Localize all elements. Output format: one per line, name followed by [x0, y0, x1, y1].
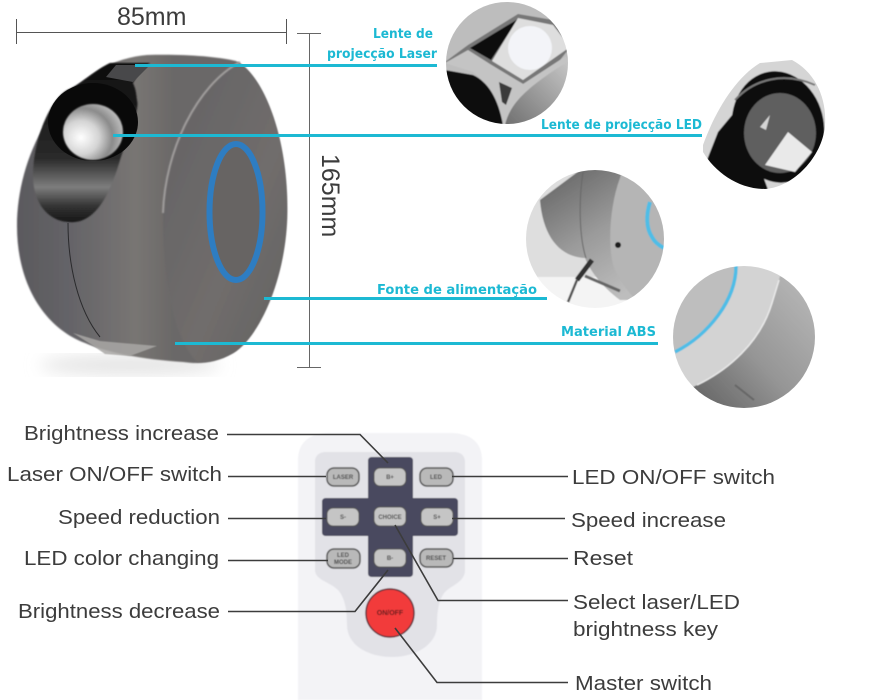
- right labels: brightness key: [573, 618, 719, 641]
- button: S-: S-: [340, 515, 346, 521]
- right labels: [571, 466, 775, 695]
- lens ring: [48, 83, 138, 161]
- button: B-: [374, 549, 406, 567]
- blue ring: [210, 144, 262, 280]
- left labels: [7, 422, 222, 623]
- button: LED: [420, 468, 453, 486]
- seam: [68, 223, 100, 337]
- right labels: Reset: [573, 547, 633, 570]
- button: S+: S+: [433, 515, 441, 521]
- label: laser lens: Lente de: [373, 27, 433, 42]
- detail circle: power input: [525, 168, 668, 310]
- button: CHOICE: [374, 507, 406, 526]
- button: B+: [374, 468, 406, 486]
- button: LED MODE: [327, 549, 360, 568]
- height dimension: 165mm: [297, 33, 344, 368]
- laser window: [106, 65, 150, 82]
- button: ON/OFF: [366, 589, 414, 637]
- button: LED: LED: [430, 475, 443, 481]
- detail circle: ABS material: [673, 266, 815, 408]
- button: CHOICE: CHOICE: [378, 515, 402, 521]
- callout line: material: [175, 342, 658, 345]
- callout line: laser: [135, 64, 437, 67]
- detail circle: laser lens: [446, 2, 568, 124]
- label: laser lens: projecção Laser: [327, 47, 438, 62]
- button: LASER: LASER: [333, 475, 354, 481]
- button: S+: [421, 508, 453, 526]
- label: power: Fonte de alimentação: [377, 283, 537, 298]
- remote control: [298, 433, 482, 700]
- left labels: Laser ON/OFF switch: [7, 463, 222, 486]
- detail circle: LED lens: [703, 60, 826, 189]
- remote button panel: [315, 452, 465, 657]
- button: LED MODE: LED: [337, 553, 350, 559]
- left labels: LED color changing: [24, 547, 219, 570]
- left labels: Speed reduction: [58, 506, 220, 529]
- button: B+: B+: [386, 475, 394, 481]
- device front face: [163, 62, 287, 362]
- button: RESET: [420, 549, 453, 567]
- label: ABS: Material ABS: [561, 325, 656, 340]
- button: LED MODE: MODE: [334, 560, 352, 566]
- label: LED lens: Lente de projecção LED: [541, 118, 702, 133]
- left labels: Brightness increase: [24, 422, 219, 445]
- button: S-: [327, 508, 359, 526]
- button: ON/OFF: ON/OFF: [377, 610, 404, 617]
- button: LASER: [327, 468, 359, 486]
- remote body: [298, 433, 482, 700]
- lens well: [33, 63, 150, 222]
- dark cross pad: [322, 457, 458, 577]
- width dimension: 85mm: [16, 3, 286, 44]
- height dimension: 165mm: 165mm: [316, 154, 344, 237]
- button: RESET: RESET: [426, 556, 446, 562]
- right labels: Speed increase: [571, 509, 726, 532]
- base feet: [73, 333, 157, 356]
- right labels: Master switch: [575, 672, 712, 695]
- right labels: LED ON/OFF switch: [572, 466, 775, 489]
- left labels: Brightness decrease: [18, 600, 220, 623]
- device body: [17, 55, 287, 363]
- projector device photo: [17, 55, 287, 375]
- button: B-: B-: [387, 556, 393, 562]
- leader lines: [227, 434, 568, 682]
- face edge highlight: [163, 62, 240, 213]
- width dimension: 85mm: 85mm: [117, 3, 186, 31]
- callout line: power: [264, 297, 547, 300]
- callout line: LED: [113, 134, 702, 137]
- right labels: Select laser/LED: [573, 591, 740, 614]
- LED lens: [63, 104, 123, 160]
